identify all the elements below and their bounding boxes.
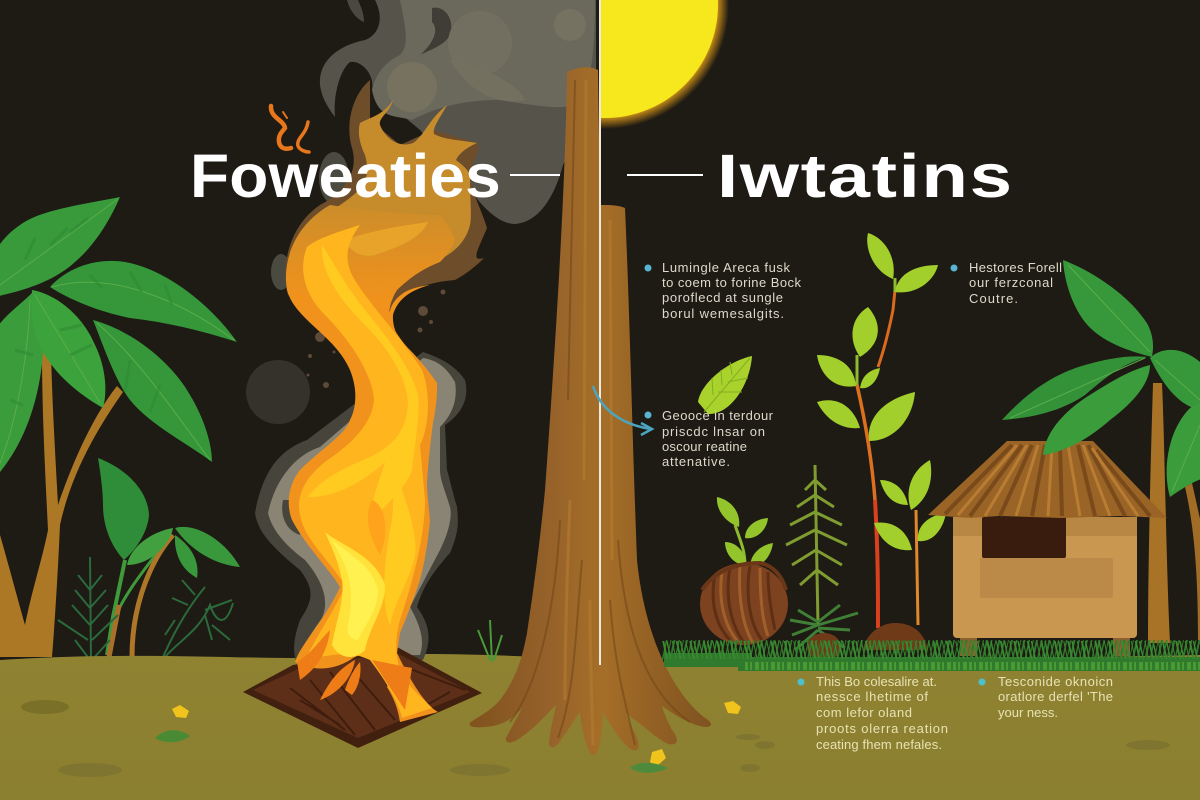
ground patches and flowers	[21, 620, 1170, 777]
ground	[0, 654, 1200, 800]
small left plant	[58, 458, 240, 662]
divider	[599, 0, 601, 665]
note: bottom right: your ness.	[998, 705, 1058, 720]
note: bottom right	[978, 674, 1113, 720]
orange flame body	[286, 205, 455, 722]
small seedling	[717, 497, 773, 567]
bright yellow streaks	[308, 245, 418, 520]
note: bottom right: Tesconide oknoicn	[998, 674, 1113, 689]
note: top left: poroflecd at sungle	[662, 290, 783, 305]
icon: small flame	[271, 106, 309, 152]
central trunk	[470, 67, 711, 755]
sparks	[306, 290, 446, 388]
side tongue	[389, 285, 430, 372]
smoke around flame	[255, 352, 466, 662]
flame core	[325, 532, 385, 657]
note: bottom left	[798, 674, 948, 752]
smoke above fire	[246, 0, 596, 424]
note: bottom left: com lefor oland	[816, 705, 912, 720]
right palm tree	[1002, 260, 1200, 643]
outer brown flame	[285, 80, 487, 310]
grass	[664, 650, 1200, 666]
orange inner leaf	[368, 500, 385, 555]
flame	[285, 80, 487, 722]
note: top left	[644, 260, 802, 321]
fern	[786, 465, 858, 650]
left palm tree	[0, 197, 237, 657]
note: top right: Hestores Forell	[969, 260, 1062, 275]
note: top left: Lumingle Areca fusk	[662, 260, 790, 275]
note: middle: priscdc lnsar on	[662, 424, 765, 439]
amber top flame	[297, 100, 477, 300]
flame tongues on logs	[297, 630, 412, 710]
fire base logs	[243, 647, 482, 748]
note: bottom left: nessce lhetime of	[816, 689, 928, 704]
note: top right: our ferzconal	[969, 275, 1053, 290]
title: right: Iwtatins	[717, 141, 1012, 210]
small nut and mound	[807, 623, 928, 661]
note: middle: Geooce in terdour	[662, 408, 774, 423]
note: bottom left: ceating fhem nefales.	[816, 737, 942, 752]
coconut	[700, 563, 788, 645]
hut	[928, 441, 1167, 656]
note: top left: borul wemesalgits.	[662, 306, 784, 321]
sun	[601, 0, 728, 128]
note: top right	[950, 260, 1062, 306]
note: middle	[644, 408, 774, 469]
note: middle: oscour reatine	[662, 439, 747, 454]
title: left: Foweaties	[190, 142, 501, 211]
tall sapling	[817, 233, 946, 628]
note: middle: attenative.	[662, 454, 730, 469]
yellow flame	[299, 225, 432, 718]
arrow	[593, 386, 652, 435]
amber streak	[345, 222, 428, 256]
front palm leaf over roof	[1043, 365, 1150, 455]
leaf above middle note	[698, 356, 752, 414]
note: bottom right: oratlore derfel 'The	[998, 689, 1113, 704]
note: top left: to coem to forine Bock	[662, 275, 802, 290]
note: top right: Coutre.	[969, 291, 1018, 306]
note: bottom left: proots olerra reation	[816, 721, 948, 736]
note: bottom left: This Bo colesalire at.	[816, 674, 937, 689]
